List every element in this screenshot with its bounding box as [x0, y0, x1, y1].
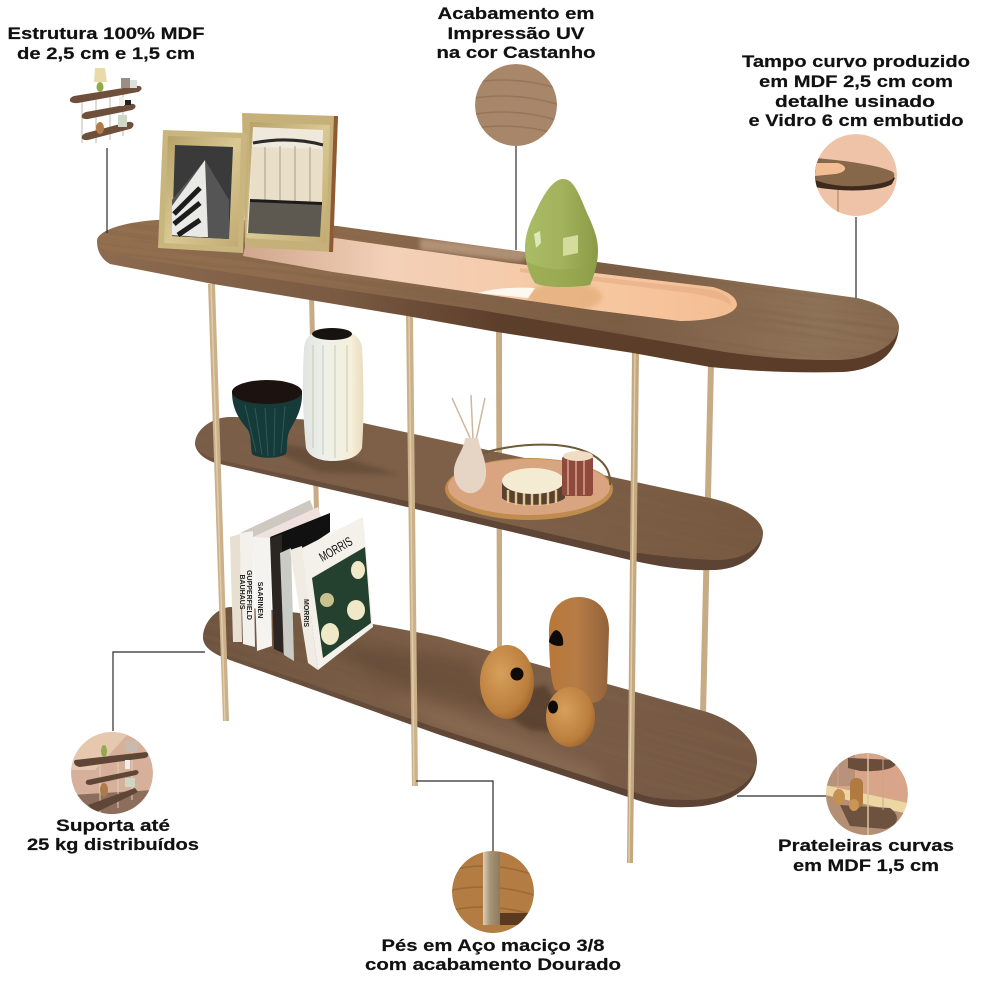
- spine titles: MORRIS: [302, 599, 309, 627]
- Morris cover: [302, 517, 373, 670]
- book spines: [230, 534, 242, 642]
- label: tampo curvo: Tampo curvo produzido: [742, 52, 970, 71]
- label: pés: com acabamento Dourado: [365, 955, 621, 974]
- label: estrutura: [8, 24, 204, 63]
- label: acabamento: na cor Castanho: [436, 43, 596, 62]
- label: acabamento: Acabamento em: [438, 4, 594, 23]
- label: tampo curvo: [742, 52, 970, 130]
- spine titles: BAUHAUS: [238, 574, 245, 610]
- mirrored tray with diffuser and candles: [445, 395, 613, 520]
- callout: gold leg detail: [452, 851, 534, 933]
- picture frames: [158, 113, 338, 253]
- label: tampo curvo: em MDF 2,5 cm com: [759, 72, 953, 91]
- label: suporta: Suporta até: [56, 816, 170, 835]
- callout: wood swatch: [475, 64, 557, 146]
- label: suporta: 25 kg distribuídos: [27, 835, 199, 854]
- dark ribbed bowl: [232, 380, 302, 458]
- label: estrutura: de 2,5 cm e 1,5 cm: [17, 44, 195, 63]
- label: estrutura: Estrutura 100% MDF: [8, 24, 204, 43]
- label: pés: Pés em Aço maciço 3/8: [382, 936, 604, 955]
- green vase: [525, 179, 598, 287]
- label: tampo curvo: e Vidro 6 cm embutido: [748, 111, 964, 130]
- label: prateleiras: em MDF 1,5 cm: [793, 856, 939, 875]
- callout: curved shelves thumbnail: [825, 752, 908, 835]
- label: prateleiras: Prateleiras curvas: [778, 836, 954, 855]
- label: pés: [365, 936, 621, 974]
- large candle: [502, 468, 565, 506]
- callout: curved top detail: [815, 134, 897, 216]
- bottom shelf: [203, 607, 757, 808]
- book pages and covers: [240, 500, 315, 540]
- label: suporta: [27, 816, 199, 854]
- label: tampo curvo: detalhe usinado: [775, 92, 935, 111]
- reed diffuser: [452, 395, 486, 493]
- small candle: [562, 451, 593, 496]
- glass inlay: [243, 238, 737, 321]
- frame: bridge photo: [242, 113, 338, 252]
- stack of books: [230, 500, 373, 670]
- middle shelf: [195, 417, 763, 570]
- label: prateleiras: [778, 836, 954, 875]
- spine titles: GUPPERFIELD: [245, 570, 252, 620]
- leader lines: [107, 146, 856, 852]
- wooden ornaments: [480, 597, 609, 747]
- label: acabamento: Impressão UV: [448, 24, 585, 43]
- callout: load capacity thumbnail: [71, 732, 153, 815]
- top shelf: [97, 220, 899, 372]
- front gold legs: [208, 284, 639, 863]
- callout: structure thumbnail: [70, 68, 142, 143]
- spine titles: SAARINEN: [256, 582, 263, 618]
- frame: building photo: [158, 130, 247, 253]
- spine titles: [238, 570, 309, 627]
- rear gold legs: [309, 295, 714, 714]
- label: acabamento: [436, 4, 596, 62]
- stack of books: MORRIS: [316, 533, 355, 565]
- cream ribbed vase: [303, 328, 364, 461]
